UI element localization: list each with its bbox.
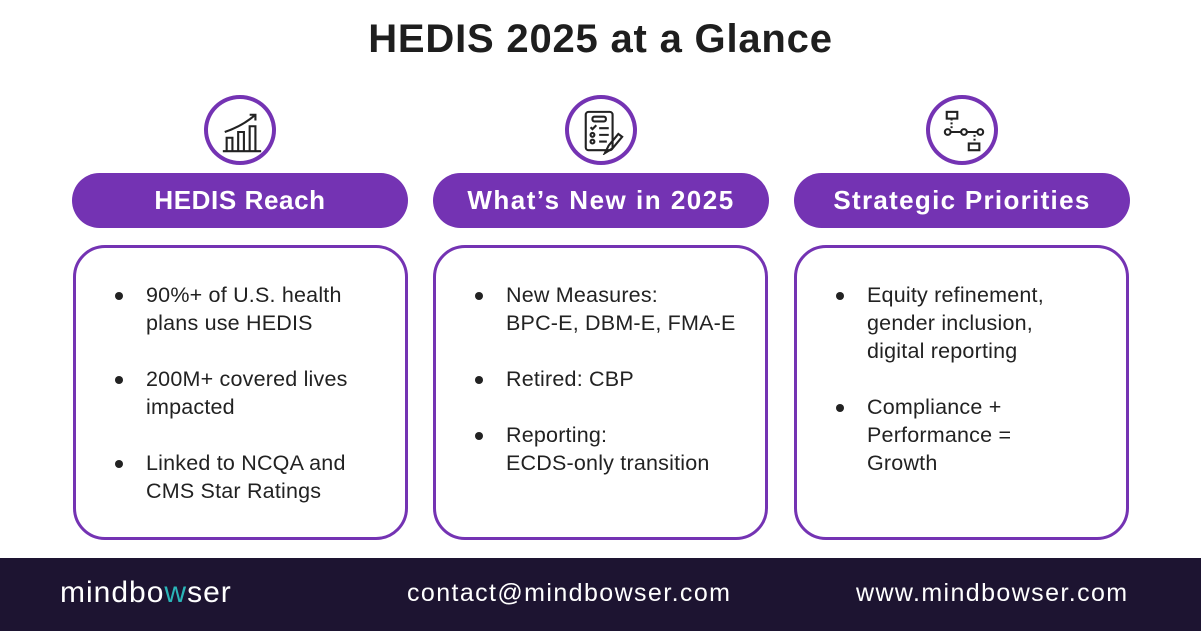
panel: What's New: Reporting: xyxy=(506,423,607,447)
panel: What's New: BPC-E, DBM-E, FMA-E xyxy=(506,311,736,335)
panel: Strategic Priorities: gender inclusion, xyxy=(867,311,1033,335)
panel: HEDIS Reach xyxy=(73,245,408,540)
panel: Strategic Priorities: Performance = xyxy=(867,423,1011,447)
pill: Strategic Priorities: Strategic Priorities xyxy=(833,185,1091,215)
panel: What's New: ECDS-only transition xyxy=(506,451,710,475)
panel: Strategic Priorities xyxy=(794,245,1129,540)
email: contact@mindbowser.com xyxy=(407,579,731,607)
website: www.mindbowser.com xyxy=(856,579,1129,607)
panel: Strategic Priorities: Growth xyxy=(867,451,938,475)
footer xyxy=(0,558,1201,631)
panel: Strategic Priorities: digital reporting xyxy=(867,339,1017,363)
pill: What's New: What’s New in 2025 xyxy=(467,185,735,215)
pill: HEDIS Reach xyxy=(72,173,408,228)
panel: HEDIS Reach: plans use HEDIS xyxy=(146,311,313,335)
panel: HEDIS Reach: 90%+ of U.S. health xyxy=(146,283,342,307)
pill: HEDIS Reach: HEDIS Reach xyxy=(154,185,326,215)
panel: HEDIS Reach: 200M+ covered lives xyxy=(146,367,348,391)
panel: Strategic Priorities: Compliance + xyxy=(867,395,1001,419)
panel: What's New: New Measures: xyxy=(506,283,658,307)
panel: HEDIS Reach: CMS Star Ratings xyxy=(146,479,321,503)
panel: What's New: Retired: CBP xyxy=(506,367,634,391)
panel: HEDIS Reach: impacted xyxy=(146,395,235,419)
icon: flow diagram xyxy=(926,95,998,165)
pill: What's New xyxy=(433,173,769,228)
icon: growth chart xyxy=(204,95,276,165)
title: HEDIS 2025 at a Glance xyxy=(368,17,833,61)
panel: Strategic Priorities: Equity refinement, xyxy=(867,283,1044,307)
panel: What's New xyxy=(433,245,768,540)
panel: HEDIS Reach: Linked to NCQA and xyxy=(146,451,346,475)
logo: mindbowser xyxy=(60,576,232,609)
icon: checklist xyxy=(565,95,637,165)
pill: Strategic Priorities xyxy=(794,173,1130,228)
